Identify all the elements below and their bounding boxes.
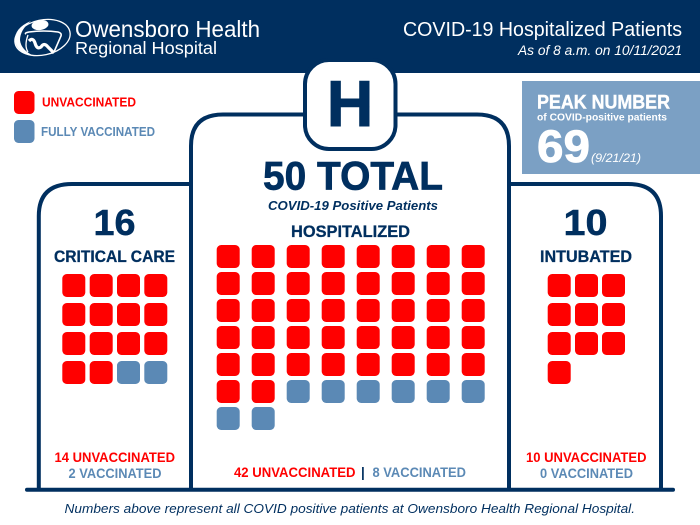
intubated counts: 10 UNVACCINATED	[526, 450, 647, 465]
hospitalized counts: |	[361, 465, 365, 480]
intubated number: 10	[564, 202, 608, 243]
critical care number: 16	[94, 202, 136, 243]
header band	[0, 0, 700, 73]
critical care heading: CRITICAL CARE	[54, 248, 175, 266]
chart: intubated squares	[548, 274, 625, 384]
panel: critical care outline	[39, 184, 191, 490]
icon: H badge	[305, 60, 396, 149]
legend	[14, 91, 155, 143]
panel: hospitalized outline	[191, 114, 509, 490]
subheading: COVID-19 Positive Patients	[268, 198, 438, 213]
baseline	[27, 488, 673, 492]
chart: critical care squares	[62, 274, 167, 384]
intubated counts	[526, 450, 647, 481]
critical care counts: 14 UNVACCINATED	[54, 450, 175, 465]
logo wordmark: Owensboro Health	[75, 16, 260, 42]
panel: intubated outline	[509, 184, 661, 490]
critical care counts	[54, 450, 175, 481]
panel: peak number: 69	[537, 121, 590, 172]
heading: hospitalized: HOSPITALIZED	[291, 223, 410, 241]
footnote: Numbers above represent all COVID positive patients at Owensboro Health Regional Hospital.	[64, 501, 635, 516]
icon: H badge: H	[327, 68, 373, 140]
panel: peak number	[522, 81, 700, 174]
panel: peak number: (9/21/21)	[591, 153, 641, 165]
critical care counts: 2 VACCINATED	[68, 466, 162, 481]
intubated heading: INTUBATED	[540, 248, 632, 266]
legend: UNVACCINATED	[42, 96, 136, 110]
legend: FULLY VACCINATED	[41, 125, 155, 139]
hospitalized counts: 8 VACCINATED	[372, 465, 466, 480]
chart: hospitalized squares	[217, 245, 485, 430]
logo wordmark	[75, 16, 260, 58]
hospitalized counts	[234, 465, 466, 480]
logo wordmark: Regional Hospital	[75, 38, 217, 58]
icon: hospital logo	[11, 15, 74, 60]
title: As of 8 a.m. on 10/11/2021	[517, 43, 682, 58]
intubated counts: 0 VACCINATED	[540, 466, 633, 481]
hospitalized counts: 42 UNVACCINATED	[234, 465, 356, 480]
title: COVID-19 Hospitalized Patients	[403, 19, 682, 41]
panel: peak number: of COVID-positive patients	[537, 112, 667, 124]
panel: peak number: PEAK NUMBER	[537, 92, 670, 114]
title	[403, 19, 682, 58]
heading: 50 total: 50 TOTAL	[263, 154, 443, 198]
